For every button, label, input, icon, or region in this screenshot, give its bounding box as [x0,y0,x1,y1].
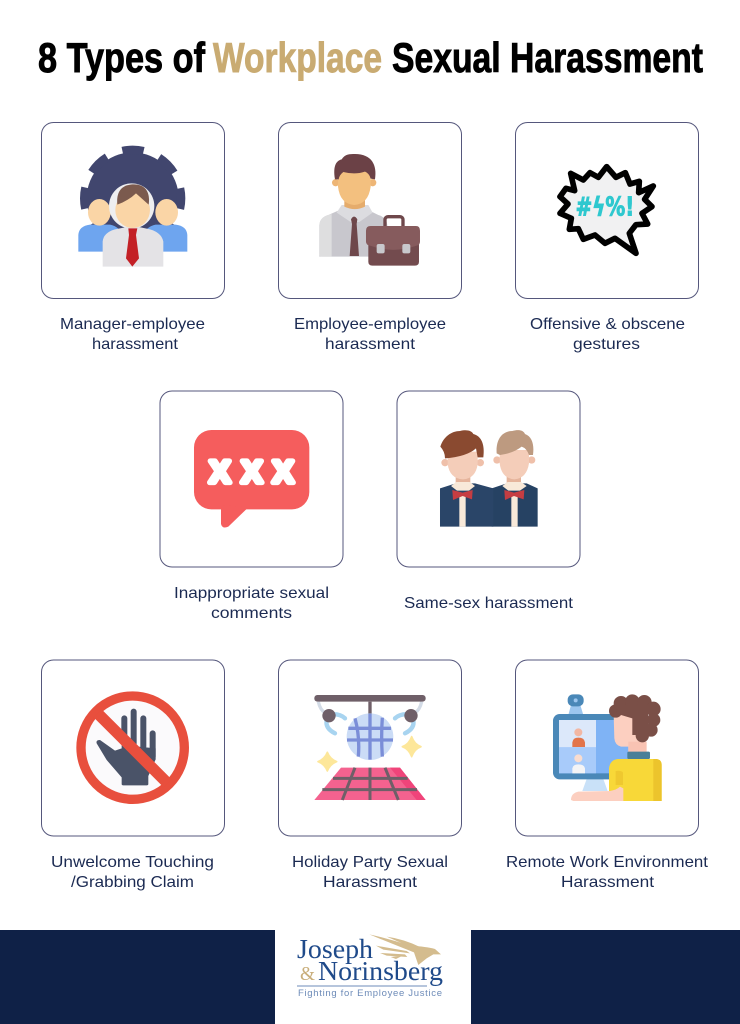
logo: Joseph & Norinsberg [297,934,443,999]
panel: holiday party [278,660,462,836]
caption: employee-employee: Employee-employee [294,316,446,333]
caption: offensive gestures: gestures [573,336,640,353]
caption: remote work [506,854,709,891]
caption: inappropriate comments: Inappropriate sexual [174,585,329,602]
caption: inappropriate comments [174,585,329,622]
title: Workplace [213,34,382,81]
logo bird [369,934,441,965]
caption: holiday party: Harassment [323,874,418,891]
title: 8 Types of [38,34,206,81]
caption: employee-employee: harassment [325,336,416,353]
icon: employee with briefcase [319,154,420,266]
caption: offensive gestures [530,316,685,353]
icon: obscene speech burst [560,167,653,253]
logo: Joseph & Norinsberg: Joseph [297,934,374,964]
logo: Joseph & Norinsberg: Fighting for Employee Justice [298,988,442,999]
icon: two men in suits [440,430,538,527]
caption: remote work: Harassment [561,874,655,891]
footer band [0,930,740,1024]
panel: offensive and obscene gestures [516,122,698,298]
caption: manager-employee: harassment [92,336,179,353]
icon: disco ball and dance floor [314,695,426,800]
caption: unwelcome touching [51,854,214,891]
person hair [609,694,661,742]
caption: holiday party [292,854,448,891]
icon: red speech bubble [194,430,309,528]
caption: manager-employee: Manager-employee [60,316,205,333]
caption: holiday party: Holiday Party Sexual [292,854,448,871]
caption: unwelcome touching: /Grabbing Claim [71,874,194,891]
icon: obscene speech burst: #ϟ%! [576,192,634,222]
panel: inappropriate sexual comments [160,391,343,567]
caption: offensive gestures: Offensive & obscene [530,316,685,333]
caption: same-sex: Same-sex harassment [404,595,574,612]
title [38,34,703,81]
icon: prohibited hand [81,696,184,799]
caption: inappropriate comments: comments [211,605,292,622]
caption: unwelcome touching: Unwelcome Touching [51,854,214,871]
panel: employee-employee harassment [278,122,462,298]
logo: Joseph & Norinsberg: & [300,963,315,985]
caption: manager-employee [60,316,205,353]
icon: person on video call [553,694,662,801]
icon: red speech bubble: XXX [209,454,294,489]
logo: Joseph & Norinsberg: Norinsberg [318,956,443,986]
panel: same-sex harassment [397,391,580,567]
panel: manager-employee harassment [42,122,224,298]
caption: employee-employee [294,316,446,353]
icon: manager with gear and employees [78,150,187,267]
panel: unwelcome touching [42,660,224,836]
panel: remote work [516,660,698,836]
caption: remote work: Remote Work Environment [506,854,709,871]
